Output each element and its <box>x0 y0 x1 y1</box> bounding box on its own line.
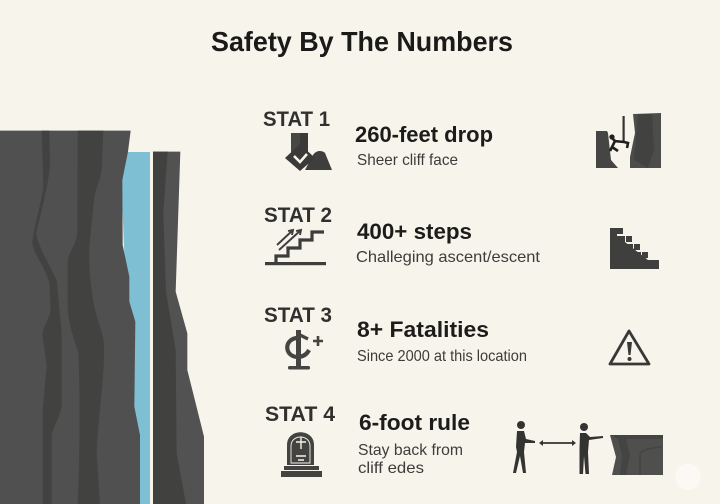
icon: gravestone <box>281 432 322 477</box>
icon: person right <box>580 423 603 474</box>
stat 1 description: Sheer cliff face <box>357 152 458 169</box>
icon: drop arrow <box>285 133 332 171</box>
stat 1 row <box>263 107 661 171</box>
water stream <box>120 152 150 504</box>
stat 4 heading: 6-foot rule <box>359 410 470 435</box>
icon: climber on cliff <box>596 113 661 168</box>
icon: person left <box>513 421 535 473</box>
stat 4 row <box>265 402 663 477</box>
icon: cliff edge <box>610 435 663 475</box>
icon: stairs with arrows <box>265 230 326 265</box>
stat 4 description: cliff edes <box>358 460 424 477</box>
icon: warning triangle <box>610 331 649 364</box>
stat 3 description: Since 2000 at this location <box>357 348 527 365</box>
stat 2 description: Challeging ascent/escent <box>356 249 541 266</box>
icon: memorial symbol <box>287 330 323 370</box>
stat 4 description: Stay back from <box>358 442 463 459</box>
stat 3 row <box>264 303 649 370</box>
stat 2 heading: 400+ steps <box>357 219 472 244</box>
stat 1 label: STAT 1 <box>263 107 330 131</box>
stat 3 label: STAT 3 <box>264 303 332 327</box>
left cliff <box>0 131 140 504</box>
stat 2 row <box>264 203 659 269</box>
arrow: six foot distance <box>539 440 576 446</box>
stat 2 label: STAT 2 <box>264 203 332 227</box>
stat 4 description <box>358 442 463 477</box>
icon: staircase block <box>610 228 659 269</box>
stat 3 heading: 8+ Fatalities <box>357 317 489 342</box>
stat 4 label: STAT 4 <box>265 402 335 426</box>
title: Safety By The Numbers <box>211 26 513 57</box>
stat 1 heading: 260-feet drop <box>355 122 493 147</box>
cliff illustration <box>0 131 204 504</box>
right cliff <box>153 152 204 504</box>
